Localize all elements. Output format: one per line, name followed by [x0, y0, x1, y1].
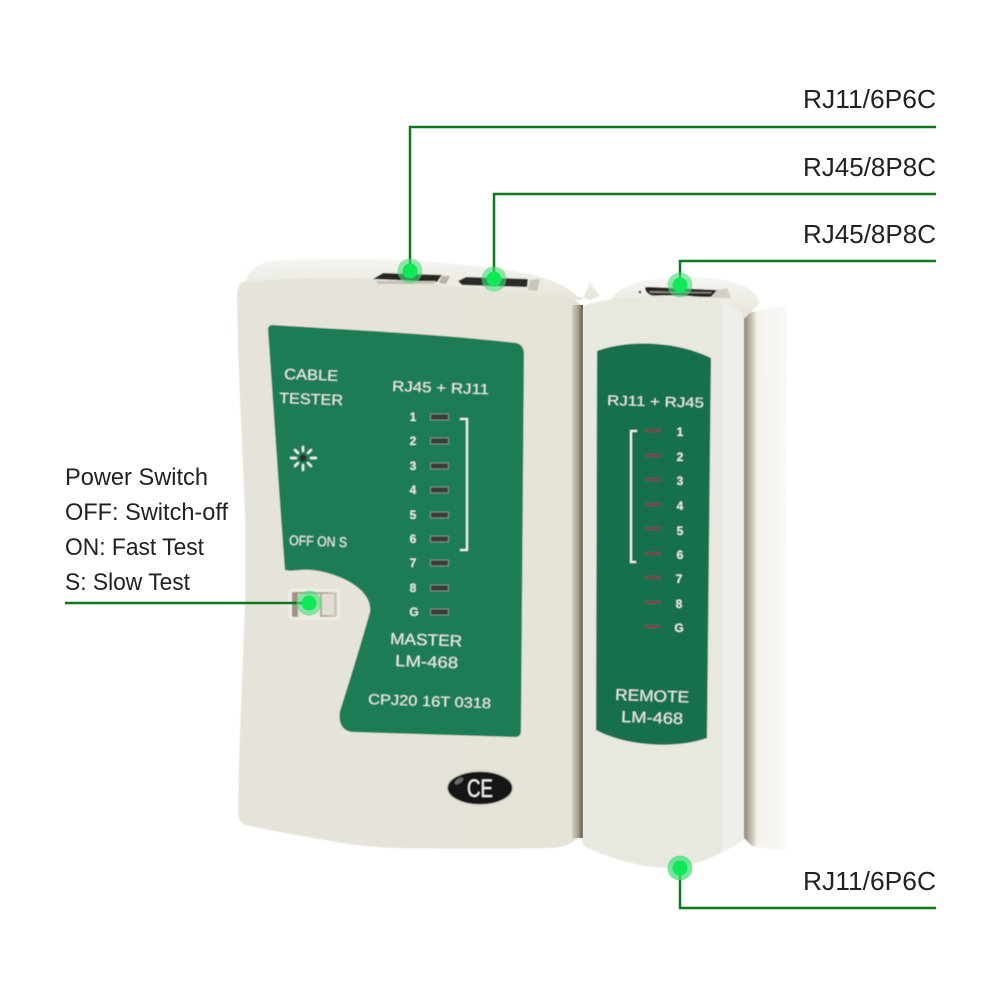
- master LED numbers: 6: [410, 532, 417, 546]
- dot: [296, 590, 322, 616]
- label: RJ11/6P6C: [803, 866, 936, 896]
- leader line: [680, 868, 936, 908]
- master body: [237, 278, 583, 849]
- callout: RJ11 master: [398, 84, 936, 284]
- master LED numbers: 8: [410, 581, 417, 595]
- panel text: remote model: LM-468: [621, 709, 684, 728]
- label: Power Switch: [65, 464, 208, 491]
- remote port: [639, 287, 731, 298]
- panel text: master model: LM-468: [395, 653, 459, 672]
- leader line: [680, 261, 936, 285]
- remote LED numbers: 7: [676, 572, 683, 586]
- device gap shadow: [572, 305, 583, 838]
- label: RJ11/6P6C: [803, 84, 936, 114]
- device: remote tester: [583, 278, 787, 868]
- leader line: [65, 602, 309, 604]
- rail on remote side: [744, 305, 787, 851]
- remote LED numbers: 4: [677, 499, 684, 513]
- panel text: cable tester: TESTER: [279, 390, 344, 409]
- port: RJ11 on master: [373, 273, 450, 284]
- remote LED numbers: 8: [676, 597, 683, 611]
- leader line: [410, 127, 936, 272]
- power slider: [288, 589, 340, 620]
- remote LEDs: [644, 429, 661, 628]
- master top ledge: [245, 258, 600, 300]
- panel text: remote model: [615, 687, 689, 728]
- master LED numbers: 5: [410, 508, 417, 522]
- master LEDs: [430, 414, 448, 615]
- label: OFF: Switch-off: [65, 499, 228, 526]
- device: master tester: [237, 258, 600, 849]
- CE mark: [447, 771, 513, 805]
- panel text: switch labels: OFF ON S: [289, 532, 347, 550]
- panel text: cable tester: [279, 366, 344, 409]
- green panel: master: [268, 325, 524, 737]
- panel text: RJ11 + RJ45: RJ11 + RJ45: [607, 392, 705, 411]
- master LED numbers: 2: [410, 434, 417, 448]
- master LED numbers: G: [409, 605, 419, 619]
- remote bracket: [631, 431, 637, 562]
- master LED numbers: 1: [410, 410, 417, 424]
- label: [65, 464, 228, 596]
- panel text: master model: [390, 631, 462, 672]
- master bracket: [460, 419, 467, 550]
- callout: RJ45 remote: [668, 219, 936, 298]
- master LED numbers: 3: [410, 459, 417, 473]
- label: RJ45/8P8C: [803, 152, 936, 182]
- dot: [398, 258, 422, 284]
- label: ON: Fast Test: [65, 534, 204, 561]
- dot: [668, 856, 692, 880]
- label: S: Slow Test: [65, 569, 190, 596]
- callout: RJ11 remote: [668, 856, 936, 908]
- remote top connector: [610, 278, 760, 318]
- panel text: remote model: REMOTE: [615, 687, 689, 707]
- remote LED numbers: 6: [677, 548, 684, 562]
- green panel: remote: [596, 343, 711, 745]
- master LED numbers: 4: [410, 483, 417, 497]
- panel text: RJ45 + RJ11: RJ45 + RJ11: [392, 379, 489, 398]
- callout: RJ45 master: [482, 152, 936, 292]
- remote LED numbers: G: [674, 621, 684, 635]
- panel text: cable tester: CABLE: [284, 366, 338, 385]
- master LED numbers: 7: [410, 556, 417, 570]
- remote LED numbers: [674, 425, 684, 635]
- remote LED numbers: 1: [677, 425, 684, 439]
- remote body: [583, 295, 744, 868]
- dot: [482, 266, 506, 292]
- panel text: serial code: CPJ20 16T 0318: [368, 692, 491, 712]
- dot: [668, 272, 692, 298]
- leader line: [494, 194, 936, 279]
- CE text: CE: [467, 775, 493, 803]
- remote LED numbers: 5: [677, 524, 684, 538]
- label: RJ45/8P8C: [803, 219, 936, 249]
- remote LED numbers: 3: [677, 474, 684, 488]
- port: RJ45 on master: [458, 277, 540, 291]
- panel text: master model: MASTER: [390, 631, 462, 651]
- callout: power switch: [65, 464, 322, 616]
- remote LED numbers: 2: [677, 450, 684, 464]
- master LED numbers: [409, 410, 419, 619]
- icon: power LED: [291, 447, 316, 470]
